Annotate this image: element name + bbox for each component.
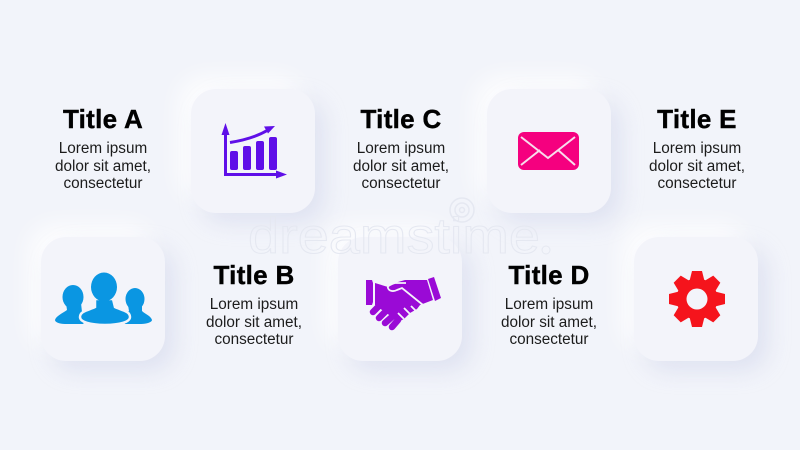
heading: Title D: Title D xyxy=(508,260,590,290)
icon: envelope xyxy=(518,132,579,170)
text: Title C description: Lorem ipsum xyxy=(357,140,445,157)
panel: Title E text xyxy=(649,104,745,192)
text: Title D description: Lorem ipsum xyxy=(505,296,593,313)
panel: envelope icon card xyxy=(487,89,611,213)
panel: chart icon card xyxy=(191,89,315,213)
text: Title C description: dolor sit amet, xyxy=(353,158,449,174)
icon: gear xyxy=(669,271,725,327)
text: Title E description xyxy=(649,140,745,192)
watermark: dreamstime xyxy=(248,208,540,264)
text: Title B description: consectetur xyxy=(214,331,294,348)
text: Title A description: dolor sit amet, xyxy=(55,158,151,174)
panel: Title A text xyxy=(55,104,151,192)
text: Title C description xyxy=(353,140,449,192)
icon: bar chart with rising arrow xyxy=(222,123,287,178)
text: Title B description: dolor sit amet, xyxy=(206,314,302,330)
heading: Title B: Title B xyxy=(213,260,295,290)
text: Title A description xyxy=(55,140,151,192)
text: Title D description: dolor sit amet, xyxy=(501,314,597,330)
heading: Title A: Title A xyxy=(63,104,143,134)
panel: Title C text xyxy=(353,104,449,192)
heading: Title C: Title C xyxy=(360,104,442,134)
panel: Title D text xyxy=(501,260,597,348)
panel: Title B text xyxy=(206,260,302,348)
text: Title C description: consectetur xyxy=(361,175,441,192)
icon: group of people xyxy=(55,272,152,324)
text: Title E description: Lorem ipsum xyxy=(653,140,741,157)
text: Title D description: consectetur xyxy=(509,331,589,348)
icon: handshake xyxy=(366,277,441,330)
text: Title E description: dolor sit amet, xyxy=(649,158,745,174)
panel: handshake icon card xyxy=(338,237,462,361)
text: Title A description: Lorem ipsum xyxy=(59,140,147,157)
text: Title E description: consectetur xyxy=(657,175,737,192)
text: Title D description xyxy=(501,296,597,348)
text: Title B description xyxy=(206,296,302,348)
text: Title B description: Lorem ipsum xyxy=(210,296,298,313)
text: Title A description: consectetur xyxy=(63,175,143,192)
heading: Title E: Title E xyxy=(657,104,737,134)
panel: people icon card xyxy=(41,237,165,361)
panel: gear icon card xyxy=(634,237,758,361)
